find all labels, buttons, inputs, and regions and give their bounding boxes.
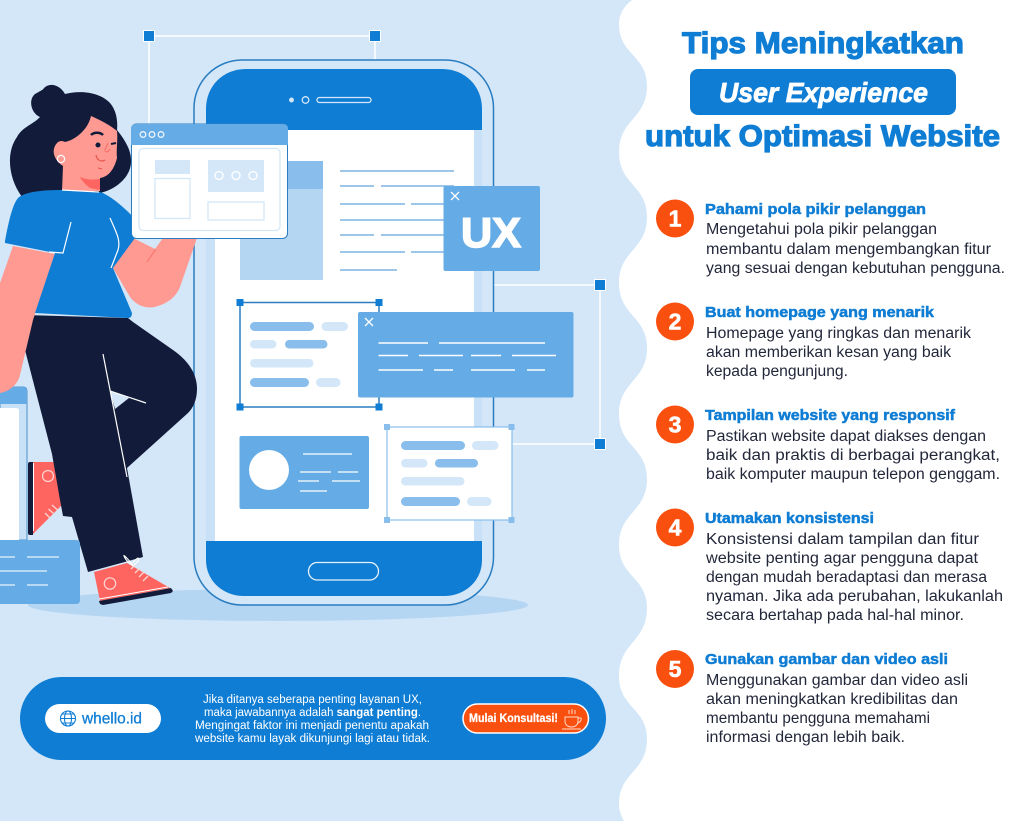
- tip 2: akan memberikan kesan yang baik: [706, 344, 951, 361]
- footer message: website kamu layak dikunjungi lagi atau tidak.: [194, 733, 430, 745]
- face details: [91, 133, 116, 169]
- phone sensor and speaker: [290, 97, 371, 103]
- consult button: Mulai Konsultasi!: [469, 713, 558, 725]
- tip 2: Homepage yang ringkas dan menarik: [706, 325, 971, 342]
- shirt: [5, 190, 135, 318]
- title badge: User Experience: [719, 77, 928, 108]
- tip 5: informasi dengan lebih baik.: [706, 729, 905, 746]
- card: UX: UX: [461, 209, 521, 256]
- window inner layout: [139, 148, 280, 230]
- tip 2: Buat homepage yang menarik: [705, 305, 935, 321]
- tip 5: [656, 650, 968, 746]
- gap between legs: [110, 391, 129, 409]
- connector lines right: [494, 280, 606, 450]
- tip 5: akan meningkatkan kredibilitas dan: [706, 691, 958, 708]
- title badge: [690, 69, 956, 115]
- neck shadow: [80, 177, 100, 190]
- tip 4: [656, 508, 1003, 624]
- face and neck: [54, 116, 117, 191]
- hair: [10, 85, 131, 197]
- footer message: Jika ditanya seberapa penting layanan UX,: [203, 694, 422, 706]
- footer message: Mengingat faktor ini menjadi penentu apakah: [195, 720, 429, 732]
- window control dots: [140, 132, 164, 137]
- left arm: [0, 246, 55, 393]
- title line 3: untuk Optimasi Website: [645, 120, 1000, 153]
- tip 1: 1: [669, 206, 682, 232]
- shirt collar and seams: [49, 190, 119, 268]
- pants: [25, 315, 197, 572]
- tip 1: Mengetahui pola pikir pelanggan: [706, 221, 937, 238]
- tip 4: nyaman. Jika ada perubahan, lakukanlah: [706, 588, 1003, 605]
- tip 1: yang sesuai dengan kebutuhan pengguna.: [706, 260, 1005, 277]
- pants crease lines: [103, 354, 146, 477]
- text placeholder lines: [340, 171, 454, 270]
- tip 4: 4: [669, 514, 682, 540]
- connector lines top: [144, 30, 380, 124]
- tip 5: 5: [669, 656, 682, 682]
- tip 4: website penting agar pengguna dapat: [705, 550, 979, 567]
- tip 3: [656, 406, 1000, 483]
- tip 2: 2: [669, 308, 681, 334]
- footer message: maka jawabannya adalah sangat penting.: [204, 707, 421, 719]
- front shoe: [94, 556, 173, 605]
- icon: globe: [60, 711, 76, 726]
- back shoe: [28, 462, 62, 535]
- woman illustration: [0, 85, 197, 605]
- tip 1: Pahami pola pikir pelanggan: [705, 202, 926, 218]
- tip 3: 3: [669, 412, 681, 438]
- profile card: [240, 436, 369, 509]
- light selection card: [384, 424, 514, 523]
- tip 4: secara bertahap pada hal-hal minor.: [706, 607, 964, 624]
- tip 3: baik komputer maupun telepon genggam.: [706, 466, 1000, 483]
- phone top bar: [206, 69, 482, 130]
- blue popup card: [358, 312, 574, 398]
- small blue card bottom left: [0, 540, 80, 604]
- title block: [645, 27, 1000, 153]
- shadow under phone: [28, 589, 528, 621]
- tip 2: [656, 302, 971, 380]
- tip 3: baik dan praktis di berbagai perangkat,: [706, 447, 1000, 464]
- tip 2: kepada pengunjung.: [706, 363, 848, 380]
- phone screen side strip: [206, 120, 482, 550]
- phone screen white: [215, 125, 474, 545]
- tip 4: dengan mudah beradaptasi dan merasa: [706, 569, 987, 586]
- phone illustration: [194, 60, 494, 605]
- earring: [57, 155, 65, 163]
- title line 1: Tips Meningkatkan: [682, 27, 964, 60]
- phone body: [194, 60, 494, 605]
- tip 5: membantu pengguna memahami: [706, 710, 930, 727]
- right arm: [113, 238, 197, 307]
- window title bar: [131, 124, 288, 145]
- phone bottom bar: [206, 541, 482, 596]
- tip 4: Utamakan konsistensi: [705, 511, 874, 527]
- selection box with placeholder bars: [236, 299, 382, 410]
- logo pill: [45, 704, 161, 733]
- consult button: [463, 704, 588, 733]
- image placeholder block: [240, 161, 323, 280]
- icon: coffee cup: [562, 709, 581, 729]
- footer call-to-action bar: [20, 677, 606, 760]
- browser window card held by woman: [131, 124, 288, 238]
- tip 3: Pastikan website dapat diakses dengan: [706, 428, 986, 445]
- brand name: whello.id: [81, 710, 142, 728]
- small tablet bottom left: [0, 387, 27, 540]
- phone home button: [308, 562, 378, 580]
- tip 1: [656, 200, 1005, 277]
- card: UX: [444, 186, 540, 271]
- tip 5: Menggunakan gambar dan video asli: [706, 672, 968, 689]
- panel: white wavy text panel: [619, 0, 1024, 821]
- tip 4: Konsistensi dalam tampilan dan fitur: [706, 531, 979, 548]
- tip 5: Gunakan gambar dan video asli: [705, 652, 948, 668]
- tip 3: Tampilan website yang responsif: [705, 408, 955, 424]
- footer message: [194, 694, 430, 745]
- tip 1: membantu dalam mengembangkan fitur: [706, 241, 991, 258]
